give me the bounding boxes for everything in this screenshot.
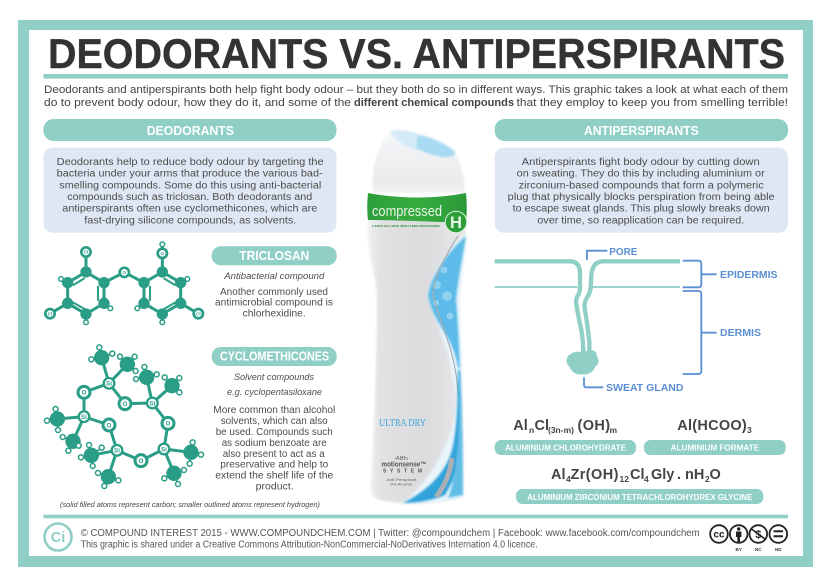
bottle text: system label: SYSTEM — [383, 468, 422, 474]
icon: creative commons licence badges: NC — [755, 547, 762, 552]
label: sweat gland: SWEAT GLAND — [606, 382, 684, 394]
icon: compound interest logo — [44, 524, 72, 550]
formula: aluminium chlorohydrate: ALUMINIUM CHLOROHYDRATE — [505, 443, 627, 452]
text block: triclosan description — [215, 271, 333, 320]
chart: cyclomethicone molecule — [44, 345, 203, 488]
text block: cyclomethicones description: solvents, which can also — [221, 416, 328, 427]
text block: cyclomethicones description: e.g. cyclopentasiloxane — [227, 387, 322, 398]
text block: deodorants description: fast-drying silicone compounds, as solvents. — [84, 215, 296, 226]
chart: triclosan molecule: Cl — [48, 311, 52, 316]
formula: aluminium zirconium tetrachlorohydrex glycine: Zr(OH) — [570, 467, 619, 483]
formula: aluminium zirconium tetrachlorohydrex glycine: . — [677, 467, 681, 483]
text block: cyclomethicones description — [213, 372, 335, 492]
chart: cyclomethicone molecule: Si — [114, 448, 120, 455]
formula: aluminium zirconium tetrachlorohydrex glycine: Cl — [630, 467, 644, 483]
formula: aluminium zirconium tetrachlorohydrex glycine: ALUMINIUM ZIRCONIUM TETRACHLOROHYDREX GLYCINE — [527, 493, 753, 502]
icon: creative commons licence badges — [710, 525, 787, 552]
text block: cyclomethicones description: as sodium benzoate are — [222, 438, 327, 449]
text block: antiperspirants description — [495, 148, 788, 233]
formula: aluminium chlorohydrate: (3n-m) — [548, 425, 574, 435]
bottle text: system label: 48h — [395, 456, 408, 462]
formula: aluminium zirconium tetrachlorohydrex glycine: 4 — [566, 474, 571, 484]
label: epidermis: EPIDERMIS — [720, 269, 778, 281]
icon: creative commons licence badges: ND — [775, 547, 782, 552]
text block: deodorants description: smelling compounds. Some do this using anti-bacterial — [59, 180, 321, 191]
chart: triclosan molecule — [45, 242, 203, 325]
text block: cyclomethicones description: More common than alcohol — [213, 405, 335, 416]
bottle text: ultra dry: ULTRA DRY — [379, 418, 426, 429]
formula: aluminium chlorohydrate: Al — [513, 418, 528, 434]
green label band: compressed — [372, 204, 442, 220]
formula: aluminium zirconium tetrachlorohydrex glycine — [516, 467, 763, 504]
heading: cyclomethicones — [212, 347, 337, 366]
chart: cyclomethicone molecule: Si — [161, 446, 167, 453]
text block: antiperspirants description: zirconium-based compounds that form a polymeric — [519, 180, 764, 191]
text block: deodorants description: Deodorants help to reduce body odour by targeting the — [57, 157, 324, 168]
heading: deodorants: DEODORANTS — [147, 123, 234, 138]
text block: triclosan description: Another commonly used — [220, 287, 328, 298]
panel: antiperspirants — [495, 119, 788, 233]
footnote: (solid filled atoms represent carbon; smaller outlined atoms represent hydrogen) — [60, 500, 321, 509]
bottle body — [368, 215, 466, 503]
bottle text: system label: 0% Alcohol — [390, 482, 412, 486]
bottle text: system label: motionsense™ — [382, 462, 426, 468]
intro text: different chemical compounds — [354, 97, 514, 109]
blue swoosh — [403, 234, 466, 504]
formula: aluminium zirconium tetrachlorohydrex glycine: 12 — [620, 474, 629, 484]
heading: cyclomethicones: CYCLOMETHICONES — [220, 350, 329, 364]
heading: antiperspirants — [495, 119, 788, 141]
footer text: © COMPOUND INTEREST 2015 - WWW.COMPOUNDCHEM.COM | Twitter: @compoundchem | Facebook: www.facebook.com/compoundchem — [81, 528, 700, 539]
heading: triclosan: TRICLOSAN — [239, 249, 309, 263]
formula: aluminium chlorohydrate: Cl — [534, 418, 549, 434]
formula: aluminium chlorohydrate: m — [610, 425, 618, 435]
bottle cap — [373, 130, 465, 193]
formula: aluminium zirconium tetrachlorohydrex glycine: Gly — [651, 467, 674, 483]
panel: cyclomethicones — [212, 347, 337, 492]
formula: aluminium zirconium tetrachlorohydrex glycine: O — [710, 467, 721, 483]
text block: cyclomethicones description: also present to act as a — [223, 449, 325, 460]
text block: deodorants description: antiperspirants often use cyclomethicones, which are — [62, 204, 318, 215]
text block: triclosan description: chlorhexidine. — [243, 309, 306, 320]
text block: antiperspirants description: over time, so reapplication can be required. — [537, 215, 744, 226]
green label band: H — [450, 214, 462, 232]
text block: antiperspirants description: on sweating. They do this by including aluminium or — [517, 169, 765, 180]
formula: aluminium chlorohydrate: n — [529, 425, 534, 435]
icon: creative commons licence badges: $ — [755, 529, 761, 541]
text block: antiperspirants description: plug that physically blocks perspiration from being able — [508, 192, 775, 203]
text block: deodorants description — [44, 148, 336, 233]
chart: triclosan molecule: O — [123, 270, 127, 275]
footer text — [81, 528, 700, 550]
chart: triclosan molecule: Cl — [84, 250, 88, 255]
icon: creative commons licence badges: BY — [736, 547, 742, 552]
label: pore: PORE — [609, 246, 637, 258]
chart: cyclomethicone molecule: O — [139, 458, 144, 465]
text block: cyclomethicones description: Solvent compounds — [234, 372, 314, 383]
text block: triclosan description: antimicrobial compound is — [215, 298, 333, 309]
chart: cyclomethicone molecule: O — [166, 421, 171, 428]
heading: antiperspirants: ANTIPERSPIRANTS — [584, 123, 699, 138]
formula: aluminium zirconium tetrachlorohydrex glycine: Al — [551, 467, 566, 483]
formula: aluminium chlorohydrate: (OH) — [578, 418, 611, 434]
label: dermis: DERMIS — [720, 327, 761, 339]
panel: triclosan — [212, 246, 337, 320]
title rule — [44, 74, 788, 79]
text block: deodorants description: bacteria under your arms that produce the various bad- — [57, 169, 323, 180]
green label band: LASTS AS LONG WITH LESS PACKAGING — [372, 224, 440, 228]
chart: cyclomethicone molecule: Si — [149, 400, 156, 407]
text block: deodorants description: compounds such as triclosan. Both deodorants and — [67, 192, 312, 203]
bottle text: system label — [382, 456, 426, 486]
heading: deodorants — [44, 119, 336, 141]
chart: cyclomethicone molecule: Si — [81, 414, 87, 421]
intro text: do to prevent body odour, how they do it, and some of the — [44, 97, 351, 109]
text block: antiperspirants description: Antiperspirants fight body odour by cutting down — [522, 157, 760, 168]
formula: aluminium zirconium tetrachlorohydrex glycine: 2 — [705, 474, 710, 484]
formula: aluminium formate: 3 — [747, 425, 752, 435]
formula: aluminium formate: ALUMINIUM FORMATE — [671, 443, 760, 452]
panel: deodorants — [44, 119, 336, 233]
footer text: This graphic is shared under a Creative Commons Attribution-NonCommercial-NoDerivatives Internation 4.0 licence. — [81, 540, 538, 550]
title: DEODORANTS VS. ANTIPERSPIRANTS — [48, 30, 785, 77]
text block: antiperspirants description: to escape sweat glands. This plug slowly breaks down — [513, 204, 770, 215]
intro text: Deodorants and antiperspirants both help fight body odour – but they both do so in different ways. This graphic takes a look at what each of them — [44, 84, 788, 96]
intro text: that they employ to keep you from smelling terrible! — [516, 97, 788, 109]
chart: cyclomethicone molecule: O — [107, 422, 112, 429]
chart: cyclomethicone molecule: Si — [106, 381, 112, 388]
chart: triclosan molecule: O — [161, 251, 165, 256]
text block: cyclomethicones description: be used. Compounds such — [216, 427, 333, 438]
chart: triclosan molecule: Cl — [196, 311, 201, 316]
icon: creative commons licence badges: cc — [713, 530, 725, 540]
text block: cyclomethicones description: preservative and help to — [220, 460, 329, 470]
text block: cyclomethicones description: product. — [256, 482, 294, 492]
icon: compound interest logo: Ci — [51, 530, 65, 546]
formula: aluminium zirconium tetrachlorohydrex glycine: 4 — [644, 474, 649, 484]
formula: aluminium zirconium tetrachlorohydrex glycine: nH — [685, 467, 704, 483]
intro text — [44, 84, 788, 109]
text block: cyclomethicones description: extend the shelf life of the — [215, 470, 334, 482]
chart: cyclomethicone molecule: O — [123, 401, 128, 408]
chart: skin and sweat gland diagram — [495, 246, 778, 394]
formula: aluminium formate — [644, 418, 786, 455]
footer rule — [44, 515, 788, 518]
green label band — [367, 193, 467, 233]
formula: aluminium formate: Al(HCOO) — [677, 418, 747, 434]
bottle text: system label: Anti-Perspirant — [386, 478, 416, 482]
formula: aluminium chlorohydrate — [495, 418, 636, 455]
chart: cyclomethicone molecule: O — [82, 390, 87, 397]
skin layers and sweat duct — [495, 261, 680, 374]
text block: triclosan description: Antibacterial compound — [223, 271, 325, 282]
bracket lines — [584, 251, 717, 387]
bottle image — [367, 130, 467, 504]
